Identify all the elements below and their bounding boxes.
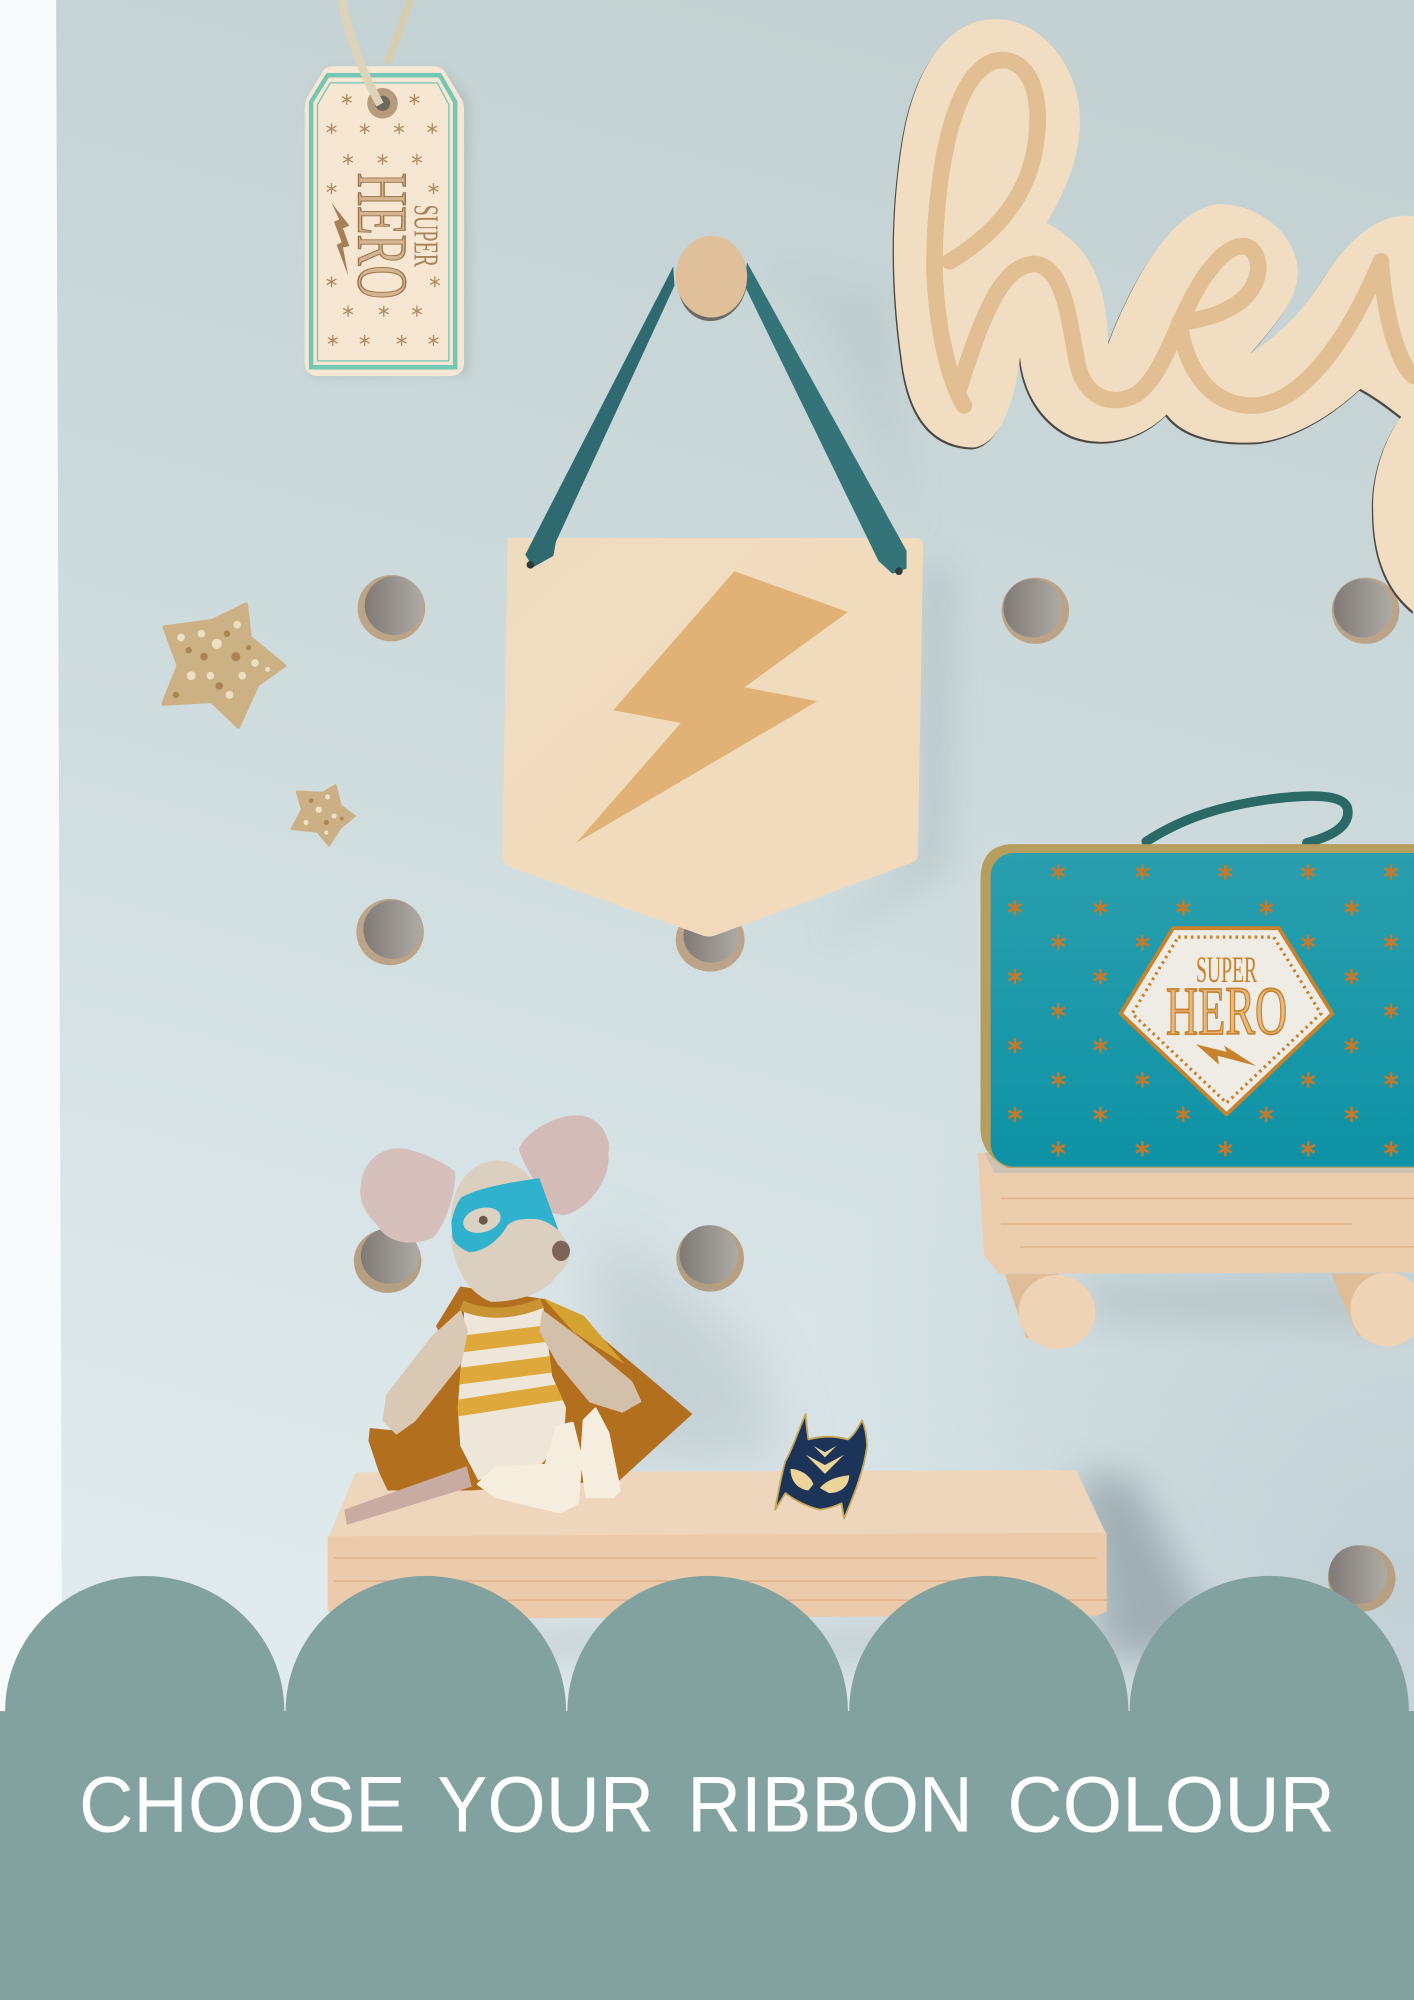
batman mask pin	[775, 1414, 867, 1519]
scalloped edge	[0, 1576, 1414, 2000]
neck scarf	[462, 1303, 542, 1313]
cape lining	[543, 1298, 625, 1364]
left arm	[384, 1312, 467, 1433]
title: RIBBON	[687, 1760, 973, 1849]
suitcase handle	[1146, 796, 1348, 843]
ribbon holes	[527, 561, 903, 575]
head	[451, 1160, 570, 1302]
hanging tag: super hero	[305, 0, 469, 377]
shelf top surface	[328, 1470, 1107, 1539]
title: YOUR	[437, 1760, 654, 1849]
small gold glitter star	[292, 785, 354, 845]
left shelf peg	[1005, 1274, 1095, 1349]
right ear	[519, 1115, 609, 1215]
tag lightning bolt	[332, 203, 349, 275]
mask eye hole	[460, 1204, 504, 1237]
cape	[368, 1286, 692, 1491]
super hero suitcase	[980, 796, 1414, 1168]
ribbon right	[743, 263, 907, 574]
hero mask	[451, 1178, 558, 1252]
engraved script line	[935, 60, 1414, 406]
tag text: super: SUPER	[406, 205, 444, 267]
badge text: super: SUPER	[1196, 949, 1257, 990]
upper wooden shelf	[978, 1153, 1414, 1349]
right shelf peg	[1331, 1272, 1414, 1346]
peg holes	[354, 575, 1399, 1612]
wooden banner with ribbon	[502, 233, 923, 937]
badge text: hero: HERO	[1166, 973, 1287, 1049]
shirt stripes	[453, 1332, 567, 1409]
badge lightning bolt	[1196, 1044, 1256, 1066]
bottom banner	[0, 1576, 1414, 2000]
teal case body	[991, 853, 1414, 1167]
banner lightning bolt	[576, 571, 848, 843]
orange stars pattern	[1008, 864, 1398, 1156]
tag text: hero: HERO	[342, 173, 421, 299]
soft shadows on pegboard	[472, 261, 1414, 1670]
ribbon left	[525, 266, 674, 567]
wooden hello sign	[893, 19, 1414, 614]
tag eyelet	[367, 88, 398, 119]
tag stars	[327, 94, 440, 346]
mouse toy in super hero costume	[344, 1115, 692, 1525]
gold rim	[980, 844, 1414, 1168]
title: CHOOSE	[79, 1760, 405, 1849]
tag string front	[342, 0, 380, 105]
wooden peg	[671, 233, 755, 328]
banner board	[502, 538, 923, 937]
hero badge	[1121, 928, 1332, 1114]
right arm	[541, 1312, 640, 1411]
lower wooden shelf	[328, 1470, 1107, 1619]
tag string back	[388, 0, 411, 64]
title: COLOUR	[1007, 1760, 1335, 1849]
right foot	[581, 1409, 620, 1497]
left ear	[360, 1148, 455, 1243]
shelf front	[978, 1153, 1414, 1274]
torso	[458, 1306, 566, 1480]
left leg and foot	[478, 1423, 581, 1512]
nose	[552, 1241, 570, 1261]
shelf front face	[328, 1533, 1107, 1619]
shelf top	[979, 1153, 1414, 1176]
large gold glitter star	[163, 604, 284, 727]
tail	[344, 1466, 472, 1525]
